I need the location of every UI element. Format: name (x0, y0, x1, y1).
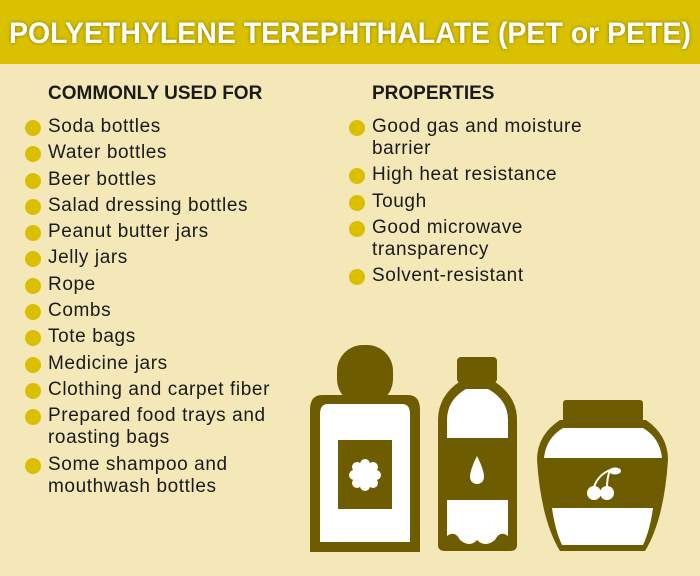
list: uses: Tote bags (48, 326, 136, 347)
list: properties (349, 116, 582, 286)
list: uses: Clothing and carpet fiber (48, 379, 270, 400)
list: properties: Tough (372, 191, 427, 212)
list: uses: Water bottles (48, 142, 167, 163)
list: uses (25, 116, 270, 497)
list: properties: High heat resistance (372, 164, 557, 185)
list: uses: Prepared food trays and roasting bags (48, 405, 266, 448)
list: uses: Combs (48, 300, 111, 321)
list: uses: Beer bottles (48, 169, 157, 190)
list: uses: Salad dressing bottles (48, 195, 248, 216)
list: uses: Medicine jars (48, 353, 168, 374)
list: properties: Good microwave transparency (372, 217, 523, 260)
heading: properties: PROPERTIES (372, 83, 494, 104)
icon: water bottle (438, 357, 517, 551)
title banner (0, 0, 700, 64)
list: uses: Some shampoo and mouthwash bottles (48, 454, 228, 497)
heading: commonly used for: COMMONLY USED FOR (48, 83, 262, 104)
icon: jar (537, 400, 668, 551)
list: uses: Peanut butter jars (48, 221, 209, 242)
icon: shampoo bottle (310, 345, 420, 552)
list: properties: Good gas and moisture barrier (372, 116, 582, 159)
list: uses: Soda bottles (48, 116, 161, 137)
list: uses: Rope (48, 274, 96, 295)
list: uses: Jelly jars (48, 247, 128, 268)
list: properties: Solvent-resistant (372, 265, 524, 286)
